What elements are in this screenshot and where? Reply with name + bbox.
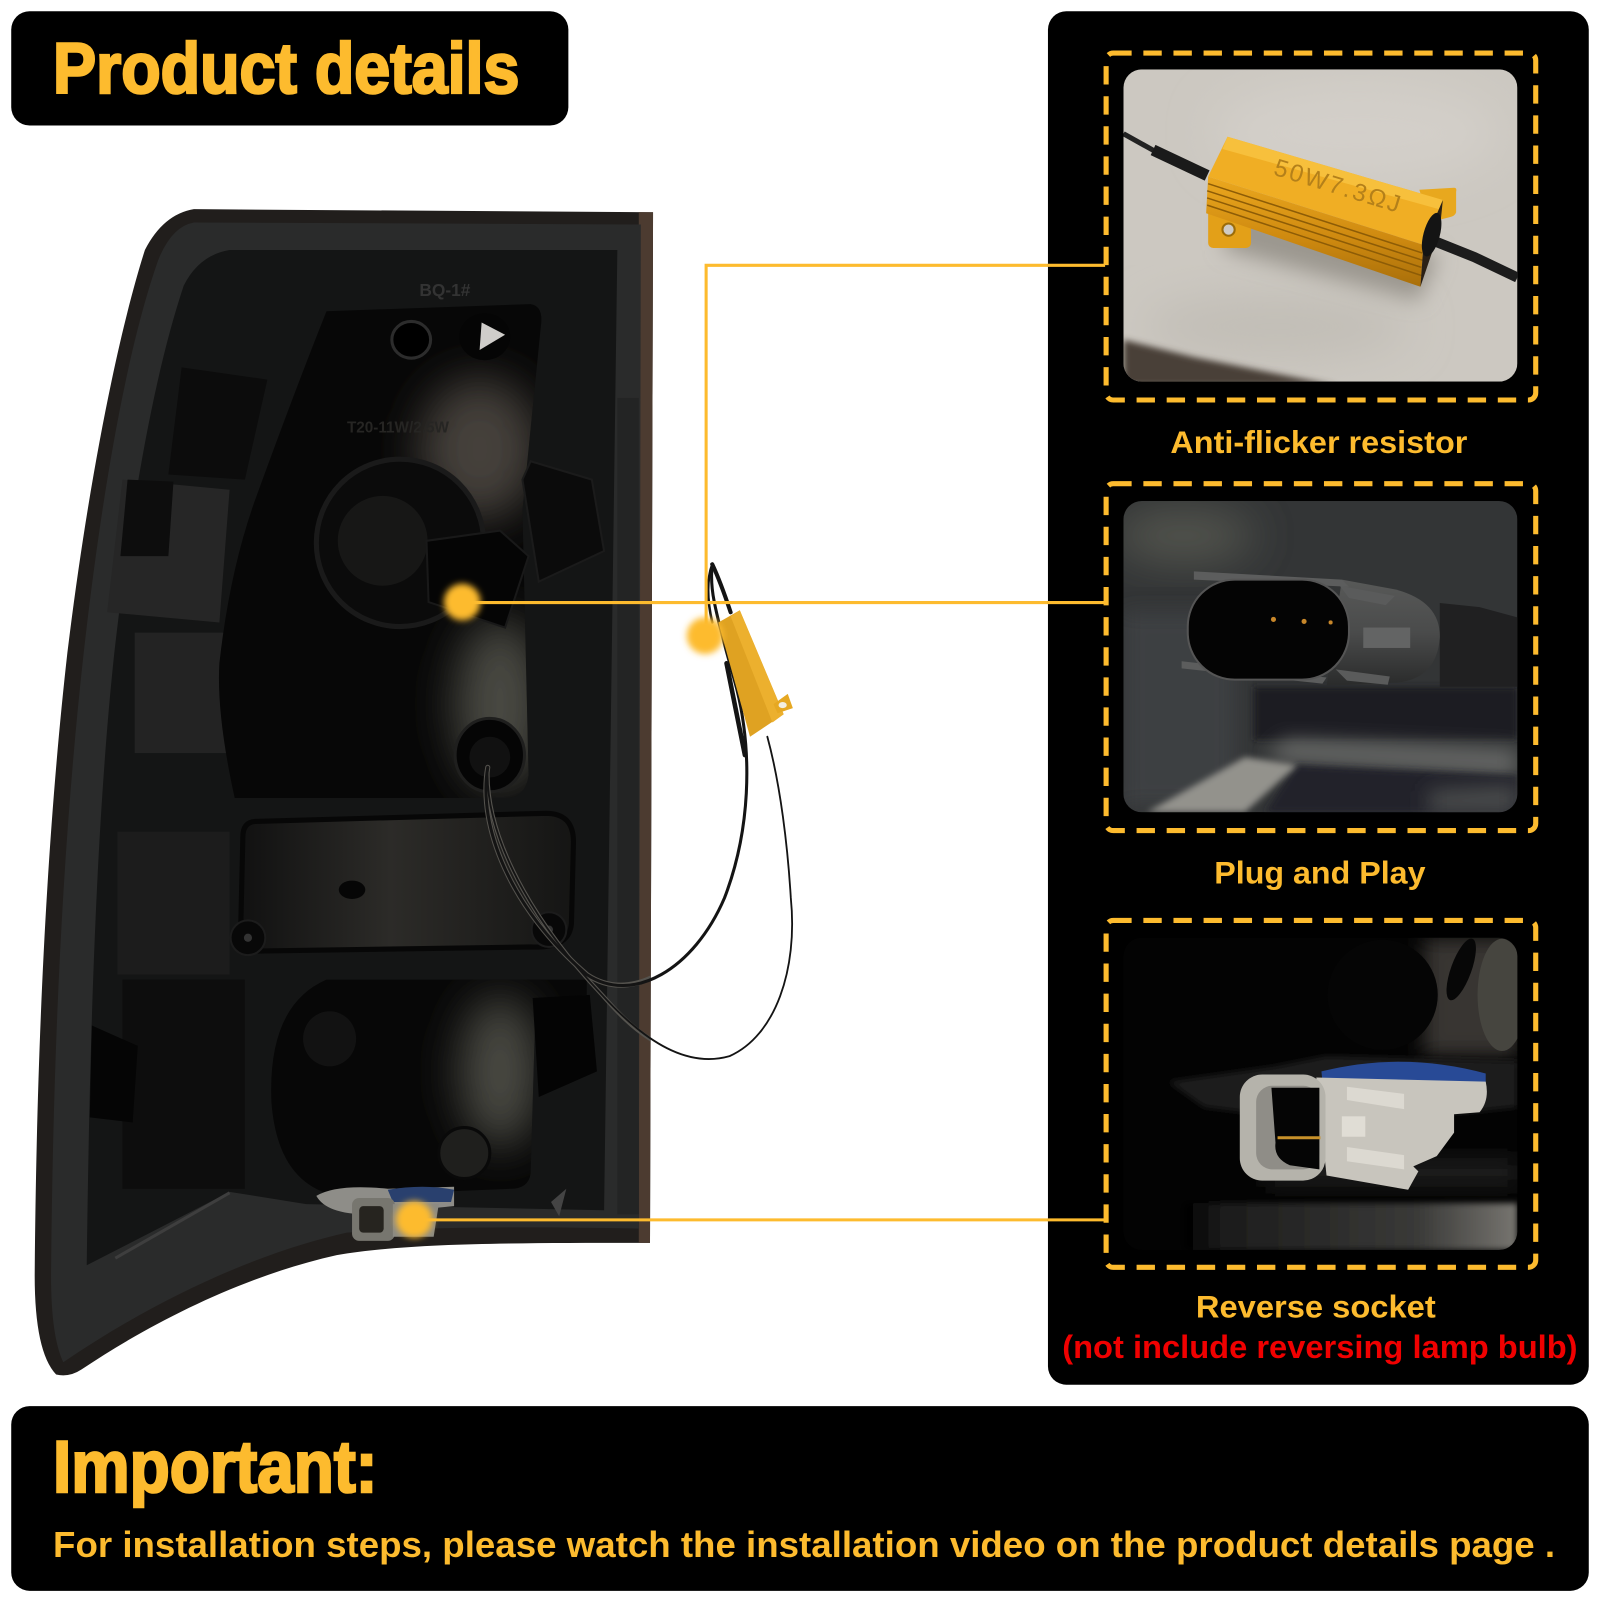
heading: Important: Important: <box>53 1425 378 1508</box>
callout dots <box>396 584 723 1238</box>
embossed part marks <box>347 280 506 1098</box>
resistor wires <box>486 564 792 1059</box>
right panel <box>1048 11 1589 1385</box>
title badge: Product details: Product details <box>53 29 519 109</box>
detail 2: plug and play <box>1106 484 1536 831</box>
detail 3: reverse socket <box>1106 920 1536 1267</box>
engraved resistor value: 50W7.3ΩJ <box>1271 154 1403 218</box>
middle panel <box>231 813 573 955</box>
central reflector housing <box>219 304 546 798</box>
bulb socket and plug <box>316 459 529 628</box>
label: Plug and Play: Plug and Play <box>1214 855 1426 891</box>
mounting holes <box>392 313 510 360</box>
detail 1: anti-flicker resistor <box>1106 53 1536 400</box>
note: not include reversing lamp bulb: (not include reversing lamp bulb) <box>1062 1328 1578 1365</box>
embossed part marks: RH <box>430 848 465 875</box>
lower reflector housing <box>271 980 597 1216</box>
embossed part marks: T20-11W/2.5W <box>347 420 450 437</box>
embossed part marks: BULB 921 <box>361 1078 443 1098</box>
embossed part marks: 12V 24W <box>404 887 506 914</box>
installation note: For installation steps, please watch the installation video on the product details page . <box>53 1525 1555 1565</box>
label: Reverse socket: Reverse socket <box>1196 1288 1436 1324</box>
external resistor body <box>718 610 793 737</box>
reverse socket connector <box>316 1187 454 1241</box>
callout lines <box>413 265 1105 1220</box>
bottom panel: important notice <box>11 1406 1589 1591</box>
embossed part marks: BQ-1# <box>419 280 471 300</box>
label: Anti-flicker resistor: Anti-flicker resistor <box>1170 424 1467 460</box>
grommet with wire <box>455 718 524 792</box>
title badge: Product details <box>11 11 568 126</box>
callout stub lines <box>1048 265 1105 1220</box>
tail lamp back view <box>35 209 655 1375</box>
right clip tab <box>522 461 604 582</box>
